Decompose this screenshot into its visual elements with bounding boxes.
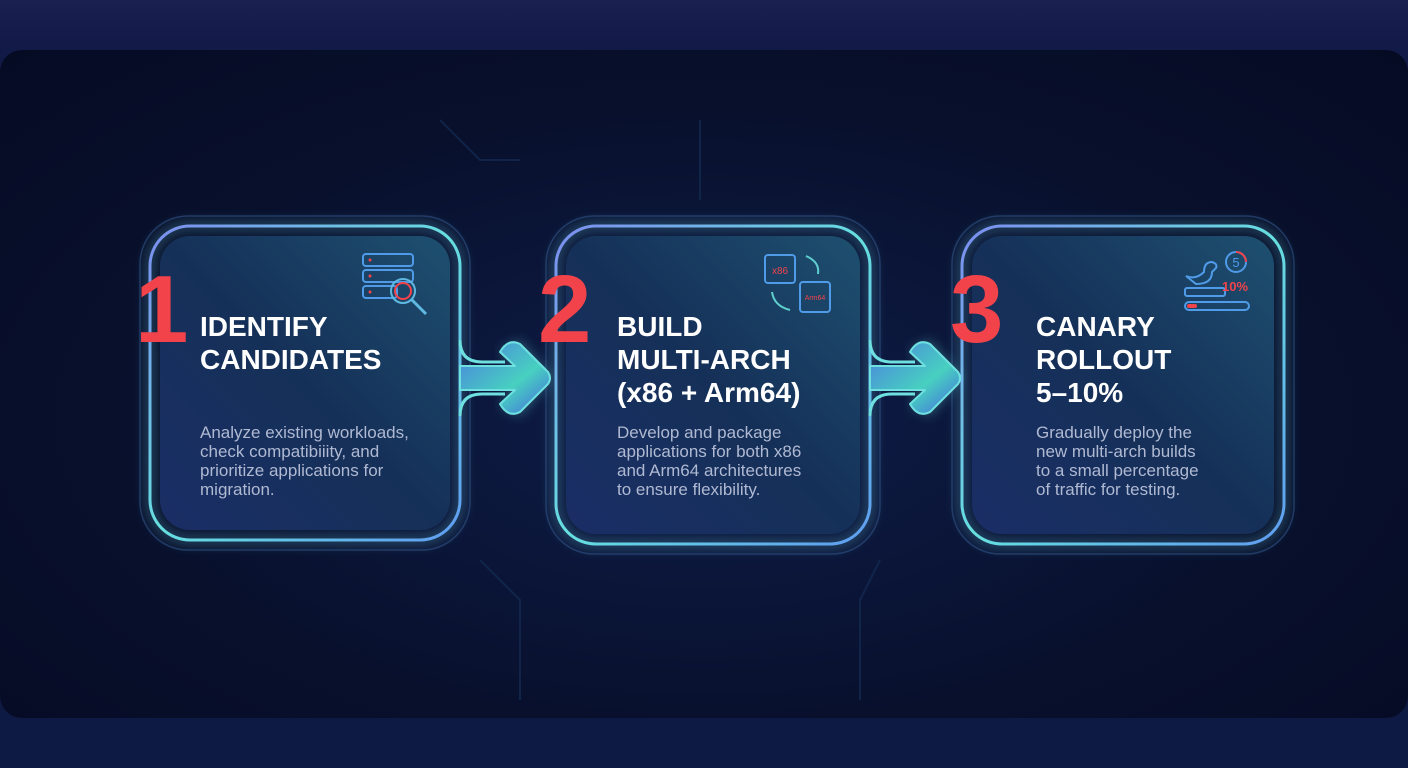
step 1 description: check compatibiiity, and [200,442,379,461]
step 2 title: (x86 + Arm64) [617,377,800,408]
step 2 title: MULTI-ARCH [617,344,791,375]
step 1 title: CANDIDATES [200,344,381,375]
step 2 description: Develop and package [617,423,781,442]
card 3 [952,216,1294,554]
card 2 [546,216,880,554]
icon: canary [1185,252,1249,310]
step 1 title [200,311,381,375]
step 2 title [617,311,800,408]
step 3 description: to a small percentage [1036,461,1199,480]
step 3 title: CANARY [1036,311,1155,342]
icon: canary: 5 [1232,255,1240,270]
step 1 description [200,423,409,499]
icon: server search [363,254,426,314]
step 2 description [617,423,801,499]
step 2 description: to ensure flexibility. [617,480,760,499]
step 2 description: and Arm64 architectures [617,461,801,480]
step 3 number: 3 [950,256,1003,363]
step 3 description: new multi-arch builds [1036,442,1196,461]
step 1 number: 1 [135,256,188,363]
step 2 number: 2 [538,256,591,363]
step 3 description [1036,423,1199,499]
icon: chips: x86 [772,266,788,277]
step 3 title [1036,311,1172,408]
step 1 title: IDENTIFY [200,311,328,342]
icon: chips [765,255,830,312]
step 3 description: of traffic for testing. [1036,480,1180,499]
step 1 description: migration. [200,480,275,499]
arrow 2 [870,340,962,416]
icon: chips: Arm64 [805,295,825,302]
step 3 title: ROLLOUT [1036,344,1171,375]
icon: canary: 10% [1222,279,1248,294]
arrow 1 [460,340,552,416]
step 3 description: Gradually deploy the [1036,423,1192,442]
step 2 description: applications for both x86 [617,442,801,461]
step 3 title: 5–10% [1036,377,1123,408]
card 1 [140,216,470,550]
step 2 title: BUILD [617,311,703,342]
step 1 description: Analyze existing workloads, [200,423,409,442]
step 1 description: prioritize applications for [200,461,383,480]
